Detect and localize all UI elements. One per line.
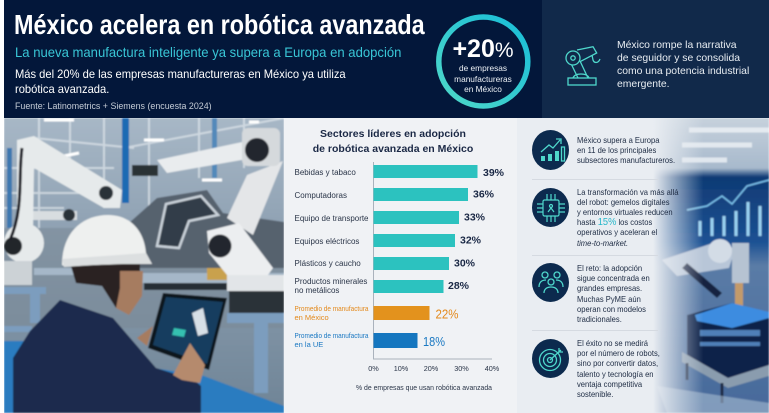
insight 2 text: y entornos virtuales reducen xyxy=(577,207,673,217)
source: Fuente: Latinometrics + Siemens (encuesta 2024) xyxy=(15,100,212,110)
insight 2 text: del robot: gemelos digitales xyxy=(577,197,670,207)
icon: people xyxy=(532,263,569,302)
factory photo: floor xyxy=(4,341,284,413)
insight 1 text: México supera a Europa xyxy=(577,135,659,145)
value labels: 28% xyxy=(448,280,470,292)
category labels: Plásticos y caucho xyxy=(294,259,361,268)
insight 4 text: El éxito no se medirá xyxy=(577,338,648,348)
insight 2 text: operativos y aceleran el xyxy=(577,227,657,237)
category labels: en México xyxy=(294,313,329,322)
icon: robot arm xyxy=(565,46,600,86)
insight 4 text: por el número de robots, xyxy=(577,348,660,358)
insight 2 text: La transformación va más allá xyxy=(577,186,678,196)
value labels: 18% xyxy=(423,335,445,349)
value labels xyxy=(423,167,505,349)
insight 3 text: El reto: la adopción xyxy=(577,263,642,273)
icon: target xyxy=(532,339,569,378)
title: México acelera en robótica avanzada xyxy=(14,9,425,40)
divider 1 xyxy=(532,179,658,180)
stat caption: de empresas xyxy=(459,63,507,73)
icon: chip xyxy=(532,188,569,227)
factory photo: right robot xyxy=(132,128,284,291)
factory photo xyxy=(4,118,284,413)
insight 4 text: talento y tecnología en xyxy=(577,369,654,379)
chart panel xyxy=(284,118,524,413)
category labels: no metálicos xyxy=(294,286,339,295)
axis labels: 20% xyxy=(424,364,439,373)
divider 2 xyxy=(532,255,658,256)
value labels: 36% xyxy=(473,188,495,200)
axis labels: 40% xyxy=(485,364,500,373)
insight 3 text: operan con modelos xyxy=(577,304,646,314)
header side note: emergente. xyxy=(617,79,670,90)
insight 2 text: time-to-market. xyxy=(577,238,628,248)
insight 3 text: sigue concentrada en xyxy=(577,273,650,283)
header right panel xyxy=(542,0,769,118)
stat ring xyxy=(436,14,531,109)
lead text: Más del 20% de las empresas manufactureras en México ya utiliza xyxy=(15,66,346,80)
category labels: en la UE xyxy=(294,340,323,349)
insight 4 text: sostenible. xyxy=(577,389,613,399)
lead text: robótica avanzada. xyxy=(15,82,109,96)
insight 3 text: Muchas PyME aún xyxy=(577,294,641,304)
bar chart xyxy=(294,162,505,392)
insight 3 text xyxy=(577,263,650,324)
chart title xyxy=(313,128,473,154)
insight 1 text xyxy=(577,135,675,165)
subtitle: La nueva manufactura inteligente ya supera a Europa en adopción xyxy=(15,44,401,60)
header band xyxy=(4,0,769,118)
right photo: robot arm xyxy=(662,239,749,316)
factory photo: left robot xyxy=(4,136,122,285)
axis labels: % de empresas que usan robótica avanzada xyxy=(356,383,493,392)
chart title: de robótica avanzada en México xyxy=(313,142,473,154)
stat caption xyxy=(454,63,512,94)
category labels: Equipo de transporte xyxy=(294,214,369,223)
right background photo xyxy=(524,118,769,413)
insight 2 text xyxy=(577,186,678,248)
chart title: Sectores líderes en adopción xyxy=(320,128,466,140)
category labels: Promedio de manufactura xyxy=(294,331,369,340)
value labels: 22% xyxy=(436,308,458,322)
insight 2 text: hasta 15% los costos xyxy=(577,216,652,228)
icon: rising chart xyxy=(532,130,569,170)
axis labels xyxy=(356,364,500,392)
category labels xyxy=(294,168,369,349)
value labels: 30% xyxy=(454,258,476,270)
category labels: Equipos eléctricos xyxy=(294,237,359,246)
factory photo: tablet and hands xyxy=(137,293,227,383)
stat value: +20% xyxy=(452,35,514,63)
insights column xyxy=(532,179,658,331)
axis labels: 30% xyxy=(454,364,469,373)
right photo: machine xyxy=(682,303,769,403)
axis labels: 0% xyxy=(368,364,379,373)
category labels: Promedio de manufactura xyxy=(294,304,369,313)
value labels: 39% xyxy=(483,167,505,179)
value labels: 33% xyxy=(464,212,486,224)
value labels: 32% xyxy=(460,234,482,246)
insight 3 text: grandes empresas. xyxy=(577,283,642,293)
stat caption: manufactureras xyxy=(454,74,512,84)
insight 4 text xyxy=(577,338,660,399)
factory photo: car body xyxy=(129,190,284,268)
stat caption: en México xyxy=(464,84,502,94)
category labels: Productos minerales xyxy=(294,277,367,286)
axis labels: 10% xyxy=(394,364,409,373)
header side note xyxy=(617,40,749,90)
insight 4 text: sino por convertir datos, xyxy=(577,358,658,368)
header side note: como una potencia industrial xyxy=(617,66,749,77)
insight 1 text: en 11 de los principales xyxy=(577,145,656,155)
bars xyxy=(374,165,478,348)
header side note: México rompe la narrativa xyxy=(617,40,737,50)
category labels: Bebidas y tabaco xyxy=(294,168,356,177)
insight 3 text: tradicionales. xyxy=(577,314,622,324)
factory photo: worker xyxy=(13,215,201,413)
category labels: Computadoras xyxy=(294,191,347,200)
insight 1 text: subsectores manufactureros. xyxy=(577,155,675,165)
divider 3 xyxy=(532,330,658,331)
insight 4 text: ventaja competitiva xyxy=(577,379,642,389)
header side note: de seguidor y se consolida xyxy=(617,53,740,64)
lead text xyxy=(15,66,346,96)
